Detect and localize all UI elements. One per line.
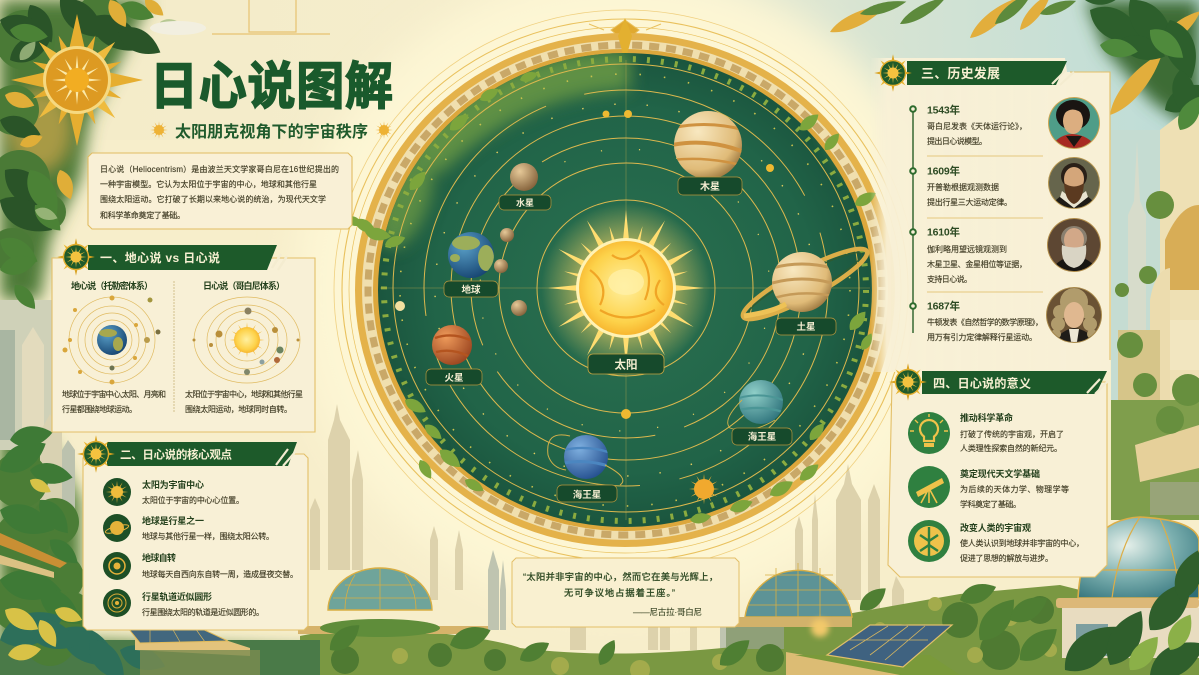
event 1687: 牛顿发表《自然哲学的数学原理》， xyxy=(927,317,1043,327)
item: near-circular orbits: 行星轨道近似圆形 xyxy=(142,591,212,602)
right towers xyxy=(1111,100,1199,520)
ground vegetation xyxy=(300,585,1199,675)
event 1609 xyxy=(927,164,1012,207)
item: earth rotation: 地球自转 xyxy=(142,552,176,563)
caption: geocentric: 行星都围绕地球运动。 xyxy=(62,404,137,414)
event 1610: 1610年 xyxy=(927,226,960,238)
caption: heliocentric: 太阳位于宇宙中心，地球和其他行星 xyxy=(185,389,303,399)
portrait: Kepler xyxy=(1048,157,1100,210)
divider xyxy=(173,281,175,413)
distant city xyxy=(310,404,904,650)
item: sun at centre: 太阳位于宇宙的中心心位置。 xyxy=(142,495,244,505)
item: modern astronomy xyxy=(908,466,1069,509)
planet label: 木星: 木星 xyxy=(700,180,720,193)
intro text panel: 和科学革命奠定了基础。 xyxy=(100,210,185,220)
small sun ornament xyxy=(683,468,725,510)
outer decorative rings xyxy=(334,10,916,570)
planet label: 木星 xyxy=(678,177,742,195)
intro text panel: 日心说（Heliocentrism）是由波兰天文学家哥白尼在16世纪提出的 xyxy=(100,164,339,174)
vines on the ring xyxy=(343,69,879,525)
gold ring band xyxy=(355,18,895,547)
event 1687 xyxy=(927,300,1043,342)
solar panel: bottom right xyxy=(786,625,960,675)
sun emblem: top left xyxy=(1,4,153,156)
item: earth is a planet xyxy=(103,514,274,542)
Uranus xyxy=(728,380,783,430)
item: scientific revolution: 打破了传统的宇宙观，开启了 xyxy=(960,429,1064,439)
quote panel: 无可争议地占据着王座。” xyxy=(564,587,675,598)
section header 2 xyxy=(71,429,297,479)
intro text panel: 一种宇宙模型。它认为太阳位于宇宙的中心，地球和其他行星 xyxy=(100,179,317,189)
Neptune xyxy=(548,435,623,485)
Mercury xyxy=(510,163,538,191)
quote panel: “太阳并非宇宙的中心，然而它在美与光辉上， xyxy=(523,571,718,582)
diagram: geocentric system xyxy=(62,296,160,384)
item: scientific revolution: 人类理性探索自然的新纪元。 xyxy=(960,443,1062,453)
disc texture xyxy=(365,51,886,521)
planet label: 地球 xyxy=(444,281,498,297)
event 1543 xyxy=(927,104,1027,146)
Jupiter xyxy=(672,111,744,179)
planet label: 水星 xyxy=(499,195,551,210)
section header 1: 一、地心说 vs 日心说 xyxy=(100,250,220,265)
subheading: heliocentric: 日心说（哥白尼体系） xyxy=(203,280,285,291)
event 1610 xyxy=(927,226,1027,284)
item: near-circular orbits: 行星围绕太阳的轨道是近似圆形的。 xyxy=(142,607,264,617)
panel 1: geocentric vs heliocentric xyxy=(51,232,315,432)
item: worldview: 改变人类的宇宙观 xyxy=(960,522,1031,533)
subheading: geocentric: 地心说（托勒密体系） xyxy=(71,280,153,291)
left towers xyxy=(0,300,75,510)
caption: geocentric xyxy=(62,389,166,414)
event 1687: 1687年 xyxy=(927,300,960,312)
panel 2: core ideas xyxy=(71,429,308,630)
planet label: 海王星 right xyxy=(732,428,792,445)
planet label: 地球: 地球 xyxy=(461,284,481,296)
planet label: 土星 xyxy=(776,318,836,335)
planet label: 海王星 right: 海王星 xyxy=(748,431,776,443)
portrait: Galileo xyxy=(1047,218,1101,272)
subtitle with sun ornaments: 太阳朋克视角下的宇宙秩序 xyxy=(175,122,368,141)
section header 4: 四、日心说的意义 xyxy=(933,376,1031,390)
event 1543: 哥白尼发表《天体运行论》， xyxy=(927,121,1027,131)
moons xyxy=(494,228,527,316)
main orbit dial xyxy=(334,10,916,570)
foliage: top right xyxy=(827,0,1199,135)
event 1609: 1609年 xyxy=(927,164,960,178)
dividers xyxy=(927,156,1043,292)
item: earth rotation xyxy=(103,552,298,580)
section header 1 xyxy=(51,232,287,282)
event 1687: 用万有引力定律解释行星运动。 xyxy=(927,332,1037,342)
subtitle with sun ornaments xyxy=(147,118,396,142)
greenhouse dome: bottom centre left xyxy=(298,568,488,637)
item: sun at centre: 太阳为宇宙中心 xyxy=(142,479,204,490)
portrait: Copernicus xyxy=(1048,97,1100,150)
event 1610: 木星卫星、金星相位等证据， xyxy=(927,259,1027,269)
orbit lines xyxy=(380,60,870,520)
item: earth is a planet: 地球是行星之一 xyxy=(142,515,204,526)
planet label: 太阳: 太阳 xyxy=(614,358,638,372)
caption: heliocentric: 围绕太阳运动，地球同时自转。 xyxy=(185,404,292,414)
section header 4 xyxy=(883,357,1108,407)
item: scientific revolution: 推动科学革命 xyxy=(960,412,1013,423)
item: modern astronomy: 为后续的天体力学、物理学等 xyxy=(960,484,1069,494)
green disc xyxy=(378,53,872,527)
item: modern astronomy: 学科奠定了基础。 xyxy=(960,499,1021,509)
event 1609: 开普勒根据观测数据 xyxy=(927,182,999,192)
planet label: 火星: 火星 xyxy=(444,373,464,384)
sun xyxy=(519,181,733,395)
event 1543: 提出日心说模型。 xyxy=(927,136,987,146)
item: earth rotation: 地球每天自西向东自转一周，造成昼夜交替。 xyxy=(142,569,298,579)
event 1610: 支持日心说。 xyxy=(927,274,972,284)
Saturn xyxy=(740,246,870,322)
quote panel: ——尼古拉·哥白尼 xyxy=(633,607,702,617)
item: worldview: 使人类认识到地球并非宇宙的中心， xyxy=(960,538,1084,548)
portrait: Newton xyxy=(1046,287,1102,345)
item: worldview xyxy=(908,520,1084,563)
item: scientific revolution xyxy=(908,412,1064,454)
intro text panel xyxy=(88,153,352,229)
greenhouse dome: bottom centre right xyxy=(722,563,852,649)
item: near-circular orbits xyxy=(103,589,264,617)
Earth xyxy=(448,232,494,278)
section header 3 xyxy=(868,48,1074,98)
section header 2: 二、日心说的核心观点 xyxy=(120,448,232,462)
planet label: 火星 xyxy=(426,369,482,385)
Mars xyxy=(432,325,472,365)
caption: geocentric: 地球位于宇宙中心,太阳、月亮和 xyxy=(62,389,166,399)
quote panel xyxy=(512,558,739,627)
item: worldview: 促进了思想的解放与进步。 xyxy=(960,553,1053,563)
planet label: 太阳 xyxy=(588,354,664,374)
section header 3: 三、历史发展 xyxy=(921,66,1000,81)
planet label: 土星: 土星 xyxy=(796,321,816,333)
foliage: bottom left xyxy=(0,423,169,675)
caption: heliocentric xyxy=(185,389,303,414)
planet label: 海王星 bottom xyxy=(557,485,617,502)
item: earth is a planet: 地球与其他行星一样，围绕太阳公转。 xyxy=(142,531,274,541)
panel 4: significance xyxy=(883,357,1108,577)
solar panel: bottom left xyxy=(128,627,260,675)
event 1609: 提出行星三大运动定律。 xyxy=(927,197,1012,207)
timeline axis xyxy=(910,106,916,333)
orbit markers xyxy=(395,110,774,419)
diagram: heliocentric system xyxy=(192,297,300,383)
foliage: top left xyxy=(0,0,330,314)
item: sun at centre xyxy=(102,477,244,507)
event 1543: 1543年 xyxy=(927,104,960,116)
panel 3: history timeline xyxy=(868,48,1110,372)
item: modern astronomy: 奠定现代天文学基础 xyxy=(960,468,1040,479)
planet label: 水星: 水星 xyxy=(516,197,534,208)
planet label: 海王星 bottom: 海王星 xyxy=(573,489,601,501)
event 1610: 伽利略用望远镜观测到 xyxy=(927,244,1007,254)
foliage: bottom strip xyxy=(324,578,1064,675)
greenhouse dome and building: right xyxy=(1055,517,1199,675)
title: 日心说图解 xyxy=(150,59,393,115)
intro text panel: 围绕太阳运动。它打破了长期以来地心说的统治，为现代天文学 xyxy=(100,194,326,204)
